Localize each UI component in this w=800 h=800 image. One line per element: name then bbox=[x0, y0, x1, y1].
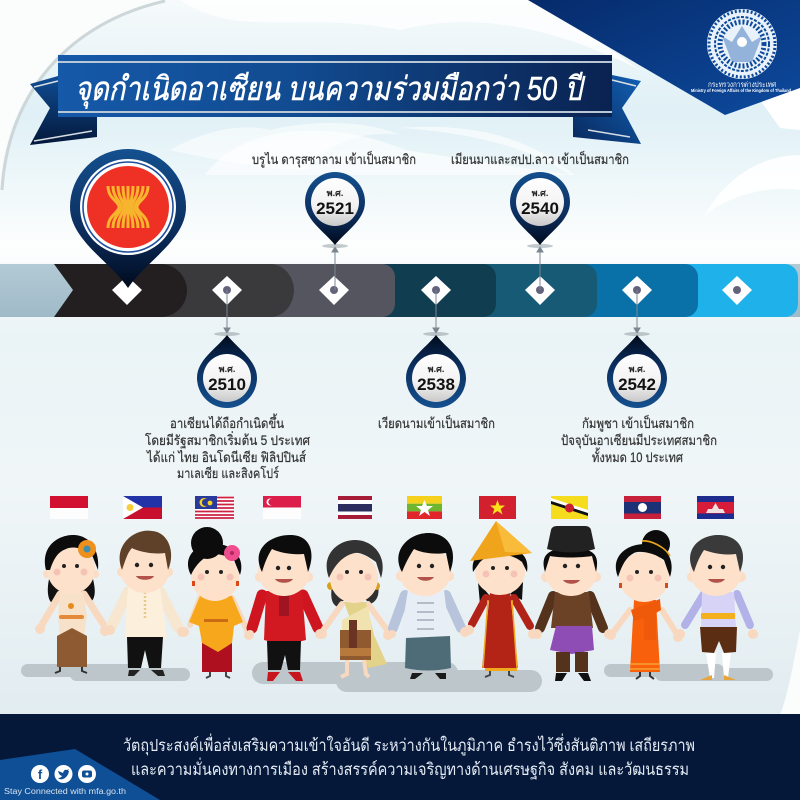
title ribbon bbox=[30, 55, 641, 145]
pin: 2538: พ.ศ. bbox=[428, 364, 444, 374]
pin: ASEAN emblem bbox=[70, 149, 186, 288]
character: Indonesia bbox=[35, 535, 110, 673]
text: ASEAN founding: โดยมีรัฐสมาชิกเริ่มต้น 5 ประเทศ bbox=[145, 431, 310, 449]
ground shadows bbox=[21, 662, 773, 692]
pin: 2521: พ.ศ. bbox=[327, 188, 343, 198]
pin: 2510 bbox=[197, 332, 257, 408]
flag: Singapore bbox=[263, 496, 301, 519]
flag: Cambodia bbox=[697, 496, 734, 519]
social icons bbox=[31, 765, 96, 783]
ministry name: กระทรวงการต่างประเทศ bbox=[708, 80, 776, 89]
text: ASEAN founding bbox=[145, 413, 310, 481]
flag: Indonesia bbox=[50, 496, 88, 519]
text: ASEAN founding: อาเซียนได้ถือกำเนิดขึ้น bbox=[170, 413, 284, 431]
social caption: Stay Connected with mfa.go.th bbox=[4, 787, 126, 796]
flag: Malaysia bbox=[195, 496, 234, 519]
character: Cambodia bbox=[675, 535, 758, 680]
social icons: f bbox=[38, 767, 43, 782]
text: Cambodia joins bbox=[561, 414, 717, 465]
character: Myanmar bbox=[388, 533, 470, 679]
flags bbox=[50, 496, 734, 519]
text: Cambodia joins: กัมพูชา เข้าเป็นสมาชิก bbox=[582, 414, 694, 432]
character: Laos bbox=[606, 530, 683, 679]
flag: Thailand bbox=[338, 496, 372, 519]
pin: 2542 bbox=[607, 332, 667, 408]
character: Thailand bbox=[317, 540, 393, 677]
footer objective text: และความมั่นคงทางการเมือง สร้างสรรค์ความเจริญทางด้านเศรษฐกิจ สังคม และวัฒนธรรม bbox=[131, 757, 689, 780]
top-right ministry panel bbox=[528, 0, 800, 115]
pin: 2540: พ.ศ. bbox=[532, 188, 548, 198]
pin: 2510: พ.ศ. bbox=[219, 364, 235, 374]
character: Singapore bbox=[246, 535, 325, 681]
flag: Laos bbox=[624, 496, 661, 519]
pin: 2510: 2510 bbox=[208, 375, 246, 394]
text: Vietnam joins: เวียดนามเข้าเป็นสมาชิก bbox=[378, 414, 495, 431]
pin: 2540 bbox=[510, 172, 570, 248]
footer objective text bbox=[123, 733, 695, 780]
pin: 2542: 2542 bbox=[618, 375, 656, 394]
text: ASEAN founding: มาเลเซีย และสิงคโปร์ bbox=[177, 465, 279, 481]
character: Vietnam bbox=[464, 521, 538, 677]
pin: 2538 bbox=[406, 332, 466, 408]
ministry name bbox=[691, 80, 791, 93]
label: Brunei joins: บรูไน ดารุสซาลาม เข้าเป็นสมาชิก bbox=[252, 150, 416, 168]
character: Brunei bbox=[532, 526, 614, 681]
text: ASEAN founding: ได้แก่ ไทย อินโดนีเซีย ฟิลิปปินส์ bbox=[146, 449, 306, 465]
pin: 2538: 2538 bbox=[417, 375, 455, 394]
flag: Philippines bbox=[123, 496, 162, 519]
text: Cambodia joins: ทั้งหมด 10 ประเทศ bbox=[592, 447, 683, 465]
flag: Vietnam bbox=[479, 496, 516, 519]
label: Myanmar and Laos join: เมียนมาและสปป.ลาว เข้าเป็นสมาชิก bbox=[451, 150, 629, 167]
character: Malaysia bbox=[179, 527, 254, 678]
flag: Brunei bbox=[551, 496, 588, 519]
ministry seal bbox=[707, 9, 777, 79]
character: Philippines bbox=[105, 531, 187, 676]
timeline band bbox=[0, 264, 800, 317]
flag: Myanmar bbox=[407, 496, 442, 519]
connector arrows bbox=[224, 247, 640, 333]
footer objective text: วัตถุประสงค์เพื่อส่งเสริมความเข้าใจอันดี ระหว่างกันในภูมิภาค ธำรงไว้ซึ่งสันติภาพ เสถียรภาพ bbox=[123, 733, 695, 756]
pin: 2540: 2540 bbox=[521, 199, 559, 218]
pin: 2542: พ.ศ. bbox=[629, 364, 645, 374]
footer blue corner bbox=[0, 749, 160, 800]
pin: 2521 bbox=[305, 172, 365, 248]
text: Cambodia joins: ปัจจุบันอาเซียนมีประเทศสมาชิก bbox=[561, 433, 717, 449]
pin: 2521: 2521 bbox=[316, 199, 354, 218]
timeline markers bbox=[112, 276, 752, 305]
footer bbox=[0, 630, 800, 800]
title: จุดกำเนิดอาเซียน บนความร่วมมือกว่า 50 ปี bbox=[75, 70, 585, 109]
